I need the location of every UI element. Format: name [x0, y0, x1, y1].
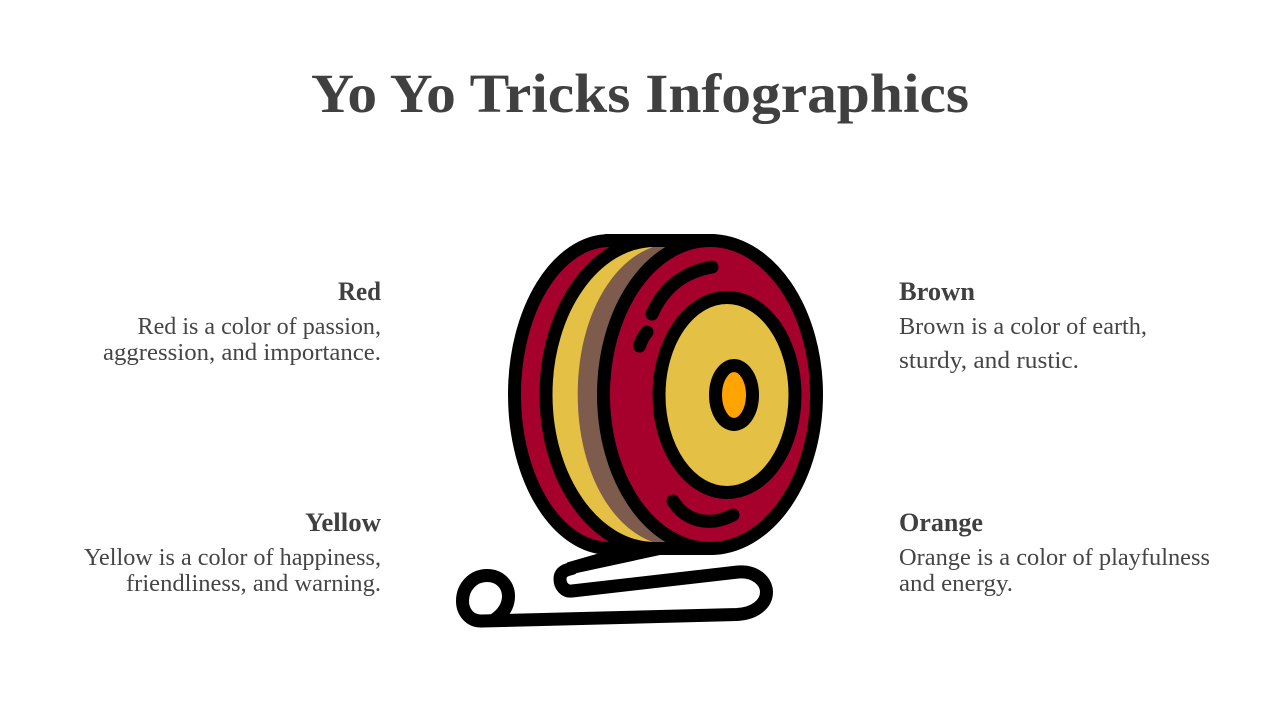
text block: orange [899, 508, 1210, 597]
text block: brown: Brown [899, 277, 976, 306]
text block: red: Red is a color of passion, [138, 314, 381, 340]
title: Yo Yo Tricks Infographics [311, 63, 969, 124]
text block: red [103, 277, 382, 366]
text block: brown: sturdy, and rustic. [899, 348, 1079, 374]
yellow axle band [546, 240, 712, 548]
text block: orange: Orange [899, 508, 983, 537]
text block: yellow: Yellow is a color of happiness, [84, 545, 381, 571]
text block: yellow [84, 508, 381, 597]
icon: yo-yo [462, 240, 816, 621]
text block: brown [899, 277, 1147, 374]
text block: yellow: Yellow [305, 508, 381, 537]
text block: yellow: friendliness, and warning. [126, 571, 381, 597]
text block: red: Red [338, 277, 382, 306]
text block: orange: Orange is a color of playfulness [899, 545, 1210, 571]
top and bottom edges [605, 240, 712, 548]
orange hub [716, 366, 752, 424]
text block: red: aggression, and importance. [103, 340, 381, 366]
brown axle band [578, 247, 700, 542]
inner yellow disc [659, 298, 795, 492]
text block: orange: and energy. [899, 571, 1013, 597]
back disc [514, 240, 712, 548]
string [462, 553, 766, 621]
highlights [640, 267, 733, 521]
text block: brown: Brown is a color of earth, [899, 314, 1147, 340]
front disc [604, 240, 816, 548]
